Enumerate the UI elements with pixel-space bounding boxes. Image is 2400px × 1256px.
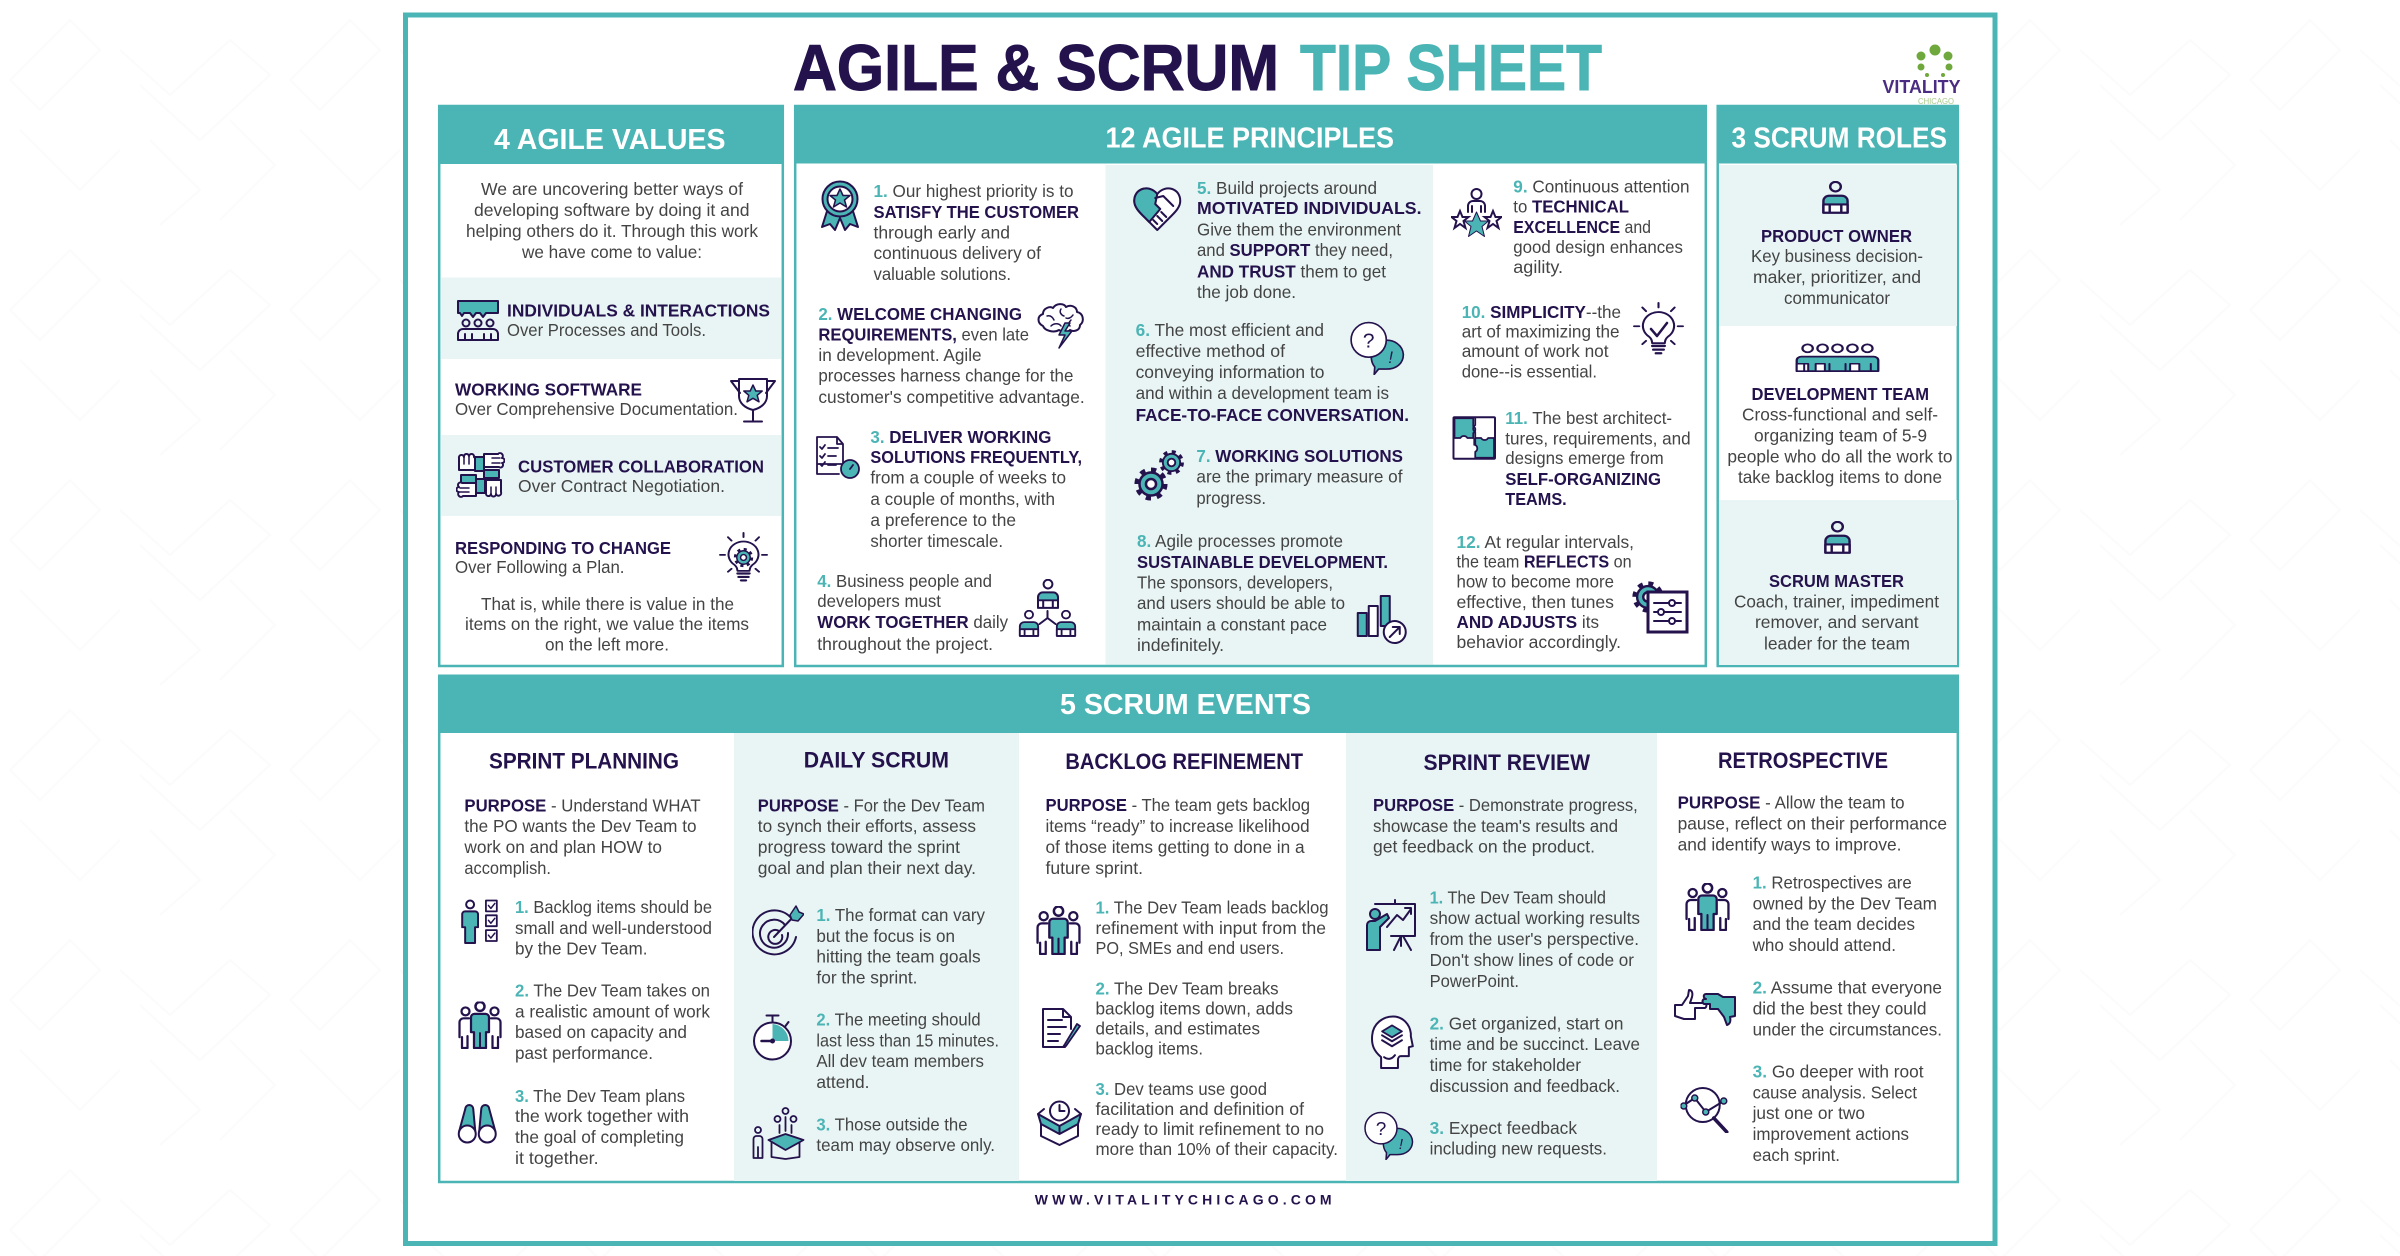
principle 2	[818, 304, 1085, 407]
column: daily scrum	[753, 748, 999, 1159]
icon: question and answer bubbles	[1365, 1112, 1412, 1160]
text: responding to change: RESPONDING TO CHANGE	[455, 538, 671, 558]
principle 9: good design enhances	[1513, 237, 1683, 257]
text: retrospective purpose: pause, reflect on their performance	[1678, 814, 1947, 834]
panel: 4 agile values	[438, 105, 784, 666]
text: working software: WORKING SOFTWARE	[455, 380, 642, 400]
heading: 4 agile values	[438, 105, 784, 164]
text: daily scrum purpose	[758, 795, 985, 878]
item 2: discussion and feedback.	[1430, 1076, 1620, 1096]
text: sprint planning purpose	[463, 795, 701, 878]
principle 6: 6. The most efficient and	[1136, 320, 1324, 340]
text: customer collaboration: CUSTOMER COLLABORATION	[518, 456, 764, 476]
text: daily scrum purpose: to synch their efforts, assess	[758, 816, 976, 836]
icon: product owner	[1823, 182, 1848, 213]
principle 12: AND ADJUSTS its	[1456, 612, 1599, 632]
item 2: 2. Assume that everyone	[1753, 978, 1942, 998]
item 2	[515, 980, 710, 1063]
panel: 5 scrum events	[438, 674, 1959, 1182]
text: daily scrum purpose: goal and plan their next day.	[758, 858, 976, 878]
title	[793, 31, 1602, 104]
principle 4: developers must	[817, 591, 941, 611]
item 2: past performance.	[515, 1043, 653, 1063]
principle 2: in development. Agile	[818, 345, 982, 365]
item 2: 2. The Dev Team takes on	[515, 980, 710, 1000]
item 3: the goal of completing	[515, 1127, 684, 1147]
item 3: the work together with	[515, 1106, 689, 1126]
icon: thumbs up and down	[1674, 989, 1736, 1026]
role: development team: DEVELOPMENT TEAM	[1752, 384, 1929, 404]
item 1	[1752, 872, 1937, 955]
icon: document with pen	[1042, 1008, 1081, 1048]
item 3: it together.	[515, 1148, 599, 1168]
icon: box with clock	[1037, 1100, 1082, 1146]
principle 11: tures, requirements, and	[1505, 428, 1691, 448]
principle 3: SOLUTIONS FREQUENTLY,	[870, 447, 1082, 467]
icon: presenter	[1366, 899, 1416, 951]
principle 6	[1136, 320, 1409, 425]
text: sprint review purpose	[1373, 795, 1638, 856]
column: backlog refinement	[1038, 749, 1338, 1159]
item 3: more than 10% of their capacity.	[1096, 1139, 1338, 1159]
principle 3: from a couple of weeks to	[870, 468, 1066, 488]
icon: person with checklist	[461, 900, 498, 944]
item 3	[1752, 1062, 1924, 1165]
role: scrum master: remover, and servant	[1755, 612, 1919, 632]
principle 12	[1456, 532, 1634, 652]
role: product owner: communicator	[1784, 288, 1890, 308]
icon: target with arrow	[752, 905, 804, 956]
item 2	[1753, 978, 1942, 1039]
item 2: time and be succinct. Leave	[1430, 1034, 1640, 1054]
principle 8: maintain a constant pace	[1137, 614, 1327, 634]
principle 8: SUSTAINABLE DEVELOPMENT.	[1137, 552, 1388, 572]
icon: scrum master	[1825, 522, 1850, 553]
item 2: a realistic amount of work	[515, 1001, 710, 1021]
item 1: but the focus is on	[816, 926, 955, 946]
text: retrospective purpose	[1678, 793, 1947, 854]
text: customer collaboration: Over Contract Negotiation.	[518, 476, 725, 496]
principle 12: 12. At regular intervals,	[1456, 532, 1634, 552]
item 3: cause analysis. Select	[1753, 1082, 1917, 1102]
item 3: 3. Expect feedback	[1430, 1118, 1577, 1138]
principle 3	[870, 427, 1082, 551]
heading: sprint review: SPRINT REVIEW	[1424, 750, 1590, 775]
icon: team hierarchy	[1020, 580, 1075, 636]
principle 11: designs emerge from	[1505, 448, 1664, 468]
item 1: show actual working results	[1430, 908, 1640, 928]
item 2: based on capacity and	[515, 1022, 687, 1042]
principle 10: art of maximizing the	[1462, 322, 1620, 342]
role: scrum master: Coach, trainer, impediment	[1734, 592, 1939, 612]
item 2: 2. Get organized, start on	[1430, 1014, 1623, 1034]
text: working software: Over Comprehensive Documentation.	[455, 399, 738, 419]
item 1	[1430, 887, 1640, 991]
text: sprint planning purpose: work on and plan HOW to	[463, 837, 662, 857]
text: values intro: developing software by doing it and	[474, 200, 750, 220]
item 3	[1096, 1079, 1338, 1159]
principle 10	[1462, 302, 1621, 382]
principle 1: SATISFY THE CUSTOMER	[874, 202, 1079, 222]
principle 8: 8. Agile processes promote	[1137, 531, 1343, 551]
icon: bulb with check	[1634, 303, 1683, 353]
icon: team	[1687, 884, 1728, 930]
principle 1: 1. Our highest priority is to	[874, 181, 1074, 201]
icon: head with layers	[1371, 1016, 1414, 1069]
item 1: who should attend.	[1752, 935, 1896, 955]
text: values intro: We are uncovering better ways of	[481, 179, 743, 199]
item 2: last less than 15 minutes.	[816, 1030, 999, 1050]
item 1: 1. The format can vary	[816, 905, 985, 925]
principle 9: EXCELLENCE and	[1513, 217, 1651, 237]
column: sprint planning	[459, 748, 712, 1168]
icon: magnifier with chart	[1680, 1087, 1729, 1133]
item 1	[1096, 898, 1329, 958]
principle 5: and SUPPORT they need,	[1197, 240, 1393, 260]
text: individuals and interactions: Over Processes and Tools.	[507, 320, 706, 340]
heading: 12 agile principles	[794, 105, 1707, 164]
item 3: including new requests.	[1430, 1139, 1607, 1159]
principle 2: processes harness change for the	[818, 366, 1073, 386]
role: scrum master: SCRUM MASTER	[1769, 571, 1904, 591]
item 3	[515, 1086, 689, 1168]
principle 6: effective method of	[1136, 341, 1285, 361]
item 2	[816, 1009, 999, 1092]
text: retrospective purpose: PURPOSE - Allow the team to	[1678, 793, 1905, 813]
principle 7: progress.	[1196, 488, 1266, 508]
heading: 3 scrum roles: 3 SCRUM ROLES	[1732, 122, 1947, 154]
role: scrum master	[1734, 571, 1939, 654]
item 1: by the Dev Team.	[515, 939, 648, 959]
principle 8: The sponsors, developers,	[1137, 572, 1333, 592]
icon: trophy	[730, 378, 776, 422]
principle 10: 10. SIMPLICITY--the	[1462, 302, 1621, 322]
icon: development team	[1797, 344, 1878, 371]
text: values closing: on the left more.	[545, 634, 669, 654]
text: backlog purpose: items “ready” to increase likelihood	[1046, 816, 1310, 836]
role: development team: organizing team of 5-9	[1754, 426, 1927, 446]
principle 7: are the primary measure of	[1196, 466, 1403, 486]
title: TIP SHEET	[1300, 31, 1602, 104]
heading: retrospective: RETROSPECTIVE	[1718, 748, 1888, 773]
principle 1: valuable solutions.	[874, 264, 1011, 284]
text: sprint review purpose: get feedback on the product.	[1373, 836, 1595, 856]
item 3: facilitation and definition of	[1096, 1099, 1304, 1119]
text: responding to change: Over Following a Plan.	[455, 557, 624, 577]
text: retrospective purpose: and identify ways to improve.	[1678, 834, 1902, 854]
logo: Vitality Chicago	[1882, 44, 1960, 106]
role: product owner	[1751, 226, 1923, 308]
principle 6: and within a development team is	[1136, 383, 1389, 403]
heading: 5 scrum events	[438, 674, 1959, 733]
item 2: time for stakeholder	[1430, 1055, 1581, 1075]
text: responding to change	[455, 538, 671, 577]
icon: gears	[1137, 452, 1182, 498]
item 3: 3. The Dev Team plans	[515, 1086, 685, 1106]
principle 1	[874, 181, 1079, 284]
item 1: 1. Backlog items should be	[515, 897, 712, 917]
principle 8: indefinitely.	[1137, 635, 1224, 655]
role: development team: take backlog items to done	[1738, 467, 1942, 487]
icon: observer with box	[752, 1107, 804, 1160]
principle 11: 11. The best architect-	[1505, 408, 1672, 428]
heading: 12 agile principles: 12 AGILE PRINCIPLES	[1106, 122, 1394, 154]
panel: 3 scrum roles	[1716, 105, 1959, 666]
heading: sprint planning: SPRINT PLANNING	[489, 748, 679, 774]
item 2: did the best they could	[1753, 998, 1926, 1018]
item 1: refinement with input from the	[1096, 918, 1326, 938]
text: sprint planning purpose: accomplish.	[464, 858, 551, 878]
text: values closing: That is, while there is value in the	[481, 594, 734, 614]
text: individuals and interactions	[507, 300, 770, 340]
principle 9	[1513, 176, 1690, 277]
item 3: each sprint.	[1753, 1145, 1840, 1165]
item 1: 1. The Dev Team should	[1430, 887, 1606, 907]
column: retrospective	[1675, 748, 1947, 1165]
item 1: 1. Retrospectives are	[1753, 872, 1912, 892]
item 3	[1430, 1118, 1607, 1159]
principle 12: the team REFLECTS on	[1456, 552, 1632, 572]
principle 6: FACE-TO-FACE CONVERSATION.	[1136, 405, 1409, 425]
text: sprint review purpose: showcase the team's results and	[1373, 816, 1618, 836]
text: sprint review purpose: PURPOSE - Demonstrate progress,	[1373, 795, 1638, 815]
principle 2: customer's competitive advantage.	[818, 387, 1085, 407]
item 2: backlog items.	[1096, 1038, 1203, 1058]
icon: hands collaboration	[456, 452, 505, 498]
principle 4: WORK TOGETHER daily	[817, 612, 1008, 632]
role: product owner: maker, prioritizer, and	[1753, 267, 1921, 287]
text: backlog purpose: of those items getting to done in a	[1046, 837, 1305, 857]
principle 7	[1196, 446, 1403, 508]
principle 6: conveying information to	[1136, 362, 1324, 382]
principle 12: how to become more	[1456, 572, 1614, 592]
icon: team	[460, 1002, 500, 1048]
item 2: attend.	[816, 1072, 870, 1092]
item 3	[816, 1114, 995, 1155]
principle 12: behavior accordingly.	[1456, 632, 1621, 652]
title: AGILE & SCRUM	[793, 31, 1279, 104]
role: development team: people who do all the work to	[1727, 446, 1952, 466]
role: product owner: PRODUCT OWNER	[1761, 226, 1912, 246]
text: backlog purpose: PURPOSE - The team gets backlog	[1046, 795, 1310, 815]
principle 7: 7. WORKING SOLUTIONS	[1196, 446, 1403, 466]
item 1: small and well-understood	[515, 918, 712, 938]
icon: handshake heart	[1133, 187, 1182, 231]
text: customer collaboration	[518, 456, 764, 496]
principle 1: continuous delivery of	[874, 243, 1041, 263]
role: scrum master: leader for the team	[1764, 634, 1910, 654]
item 2: 2. The meeting should	[816, 1009, 981, 1029]
item 2: details, and estimates	[1096, 1018, 1260, 1038]
principle 4: 4. Business people and	[817, 571, 992, 591]
item 1	[515, 897, 712, 959]
item 2: backlog items down, adds	[1096, 998, 1293, 1018]
principle 2: REQUIREMENTS, even late	[818, 324, 1029, 344]
principle 1: through early and	[874, 222, 1010, 242]
icon: stopwatch	[753, 1014, 792, 1060]
icon: gear with sliders	[1635, 584, 1687, 632]
text: values closing: items on the right, we value the items	[465, 614, 749, 634]
text: working software	[455, 380, 738, 419]
principle 4	[817, 571, 1008, 654]
column: sprint review	[1365, 750, 1640, 1160]
icon: award ribbon	[821, 180, 859, 231]
icon: checklist with stopwatch	[816, 436, 860, 479]
item 1	[816, 905, 985, 988]
heading: daily scrum: DAILY SCRUM	[804, 748, 949, 772]
principle 12: effective, then tunes	[1456, 592, 1614, 612]
item 1: owned by the Dev Team	[1753, 893, 1937, 913]
principle 10: amount of work not	[1462, 341, 1609, 361]
text: values closing	[465, 594, 749, 654]
item 1: PO, SMEs and end users.	[1096, 938, 1284, 958]
item 3: team may observe only.	[816, 1135, 995, 1155]
principle 3: a couple of months, with	[870, 489, 1055, 509]
principle 11: SELF-ORGANIZING	[1505, 469, 1661, 489]
heading: backlog refinement: BACKLOG REFINEMENT	[1065, 749, 1304, 774]
principle 5: Give them the environment	[1197, 220, 1401, 240]
text: daily scrum purpose: progress toward the sprint	[758, 837, 960, 857]
principle 8	[1137, 531, 1388, 655]
heading: 5 scrum events: 5 SCRUM EVENTS	[1060, 689, 1311, 721]
icon: binoculars	[458, 1104, 497, 1144]
principle 8: and users should be able to	[1137, 593, 1345, 613]
text: values intro: helping others do it. Through this work	[466, 221, 758, 241]
principle 5: 5. Build projects around	[1197, 178, 1377, 198]
item 3: 3. Dev teams use good	[1096, 1079, 1267, 1099]
icon: bar chart with arrow	[1356, 595, 1407, 644]
item 1: and the team decides	[1753, 914, 1915, 934]
principle 5: MOTIVATED INDIVIDUALS.	[1197, 198, 1422, 218]
item 1: for the sprint.	[816, 968, 918, 988]
principle 9: to TECHNICAL	[1513, 196, 1629, 216]
item 3: ready to limit refinement to no	[1096, 1119, 1324, 1139]
principle 5	[1197, 178, 1422, 302]
icon: question and answer bubbles	[1351, 323, 1403, 374]
role: development team	[1727, 384, 1952, 487]
logo: Vitality Chicago: VITALITY	[1882, 77, 1960, 97]
item 1: Don't show lines of code or	[1430, 950, 1634, 970]
principle 11: TEAMS.	[1505, 489, 1567, 509]
item 2: 2. The Dev Team breaks	[1096, 979, 1279, 999]
item 2	[1096, 979, 1293, 1058]
item 1: hitting the team goals	[816, 947, 981, 967]
icon: puzzle	[1452, 416, 1496, 460]
icon: bulb with gear	[720, 533, 767, 580]
icon: team	[1038, 907, 1079, 954]
role: product owner: Key business decision-	[1751, 246, 1923, 266]
item 1: PowerPoint.	[1430, 971, 1519, 991]
heading: 4 agile values: 4 AGILE VALUES	[494, 124, 726, 156]
principle 3: 3. DELIVER WORKING	[870, 427, 1051, 447]
item 3: just one or two	[1752, 1103, 1865, 1123]
icon: brain with lightning	[1038, 303, 1084, 349]
text: sprint planning purpose: PURPOSE - Understand WHAT	[464, 795, 701, 815]
icon: person with stars	[1451, 188, 1502, 237]
text: backlog purpose	[1046, 795, 1310, 878]
principle 5: the job done.	[1197, 282, 1296, 302]
principle 10: done--is essential.	[1462, 362, 1597, 382]
heading: 3 scrum roles	[1716, 105, 1959, 164]
item 2: under the circumstances.	[1753, 1019, 1942, 1039]
item 1: from the user's perspective.	[1430, 929, 1639, 949]
text: values intro: we have come to value:	[521, 242, 702, 262]
text: sprint planning purpose: the PO wants the Dev Team to	[464, 816, 696, 836]
logo: Vitality Chicago: CHICAGO	[1918, 97, 1954, 106]
icon: individuals and interactions	[457, 300, 499, 341]
text: individuals and interactions: INDIVIDUALS & INTERACTIONS	[507, 300, 770, 320]
item 2: All dev team members	[816, 1051, 984, 1071]
role: development team: Cross-functional and self-	[1742, 404, 1938, 424]
principle 2: 2. WELCOME CHANGING	[818, 304, 1022, 324]
item 3: 3. Those outside the	[816, 1114, 968, 1134]
text: daily scrum purpose: PURPOSE - For the Dev Team	[758, 795, 985, 815]
panel: 12 agile principles	[794, 105, 1707, 666]
principle 9: 9. Continuous attention	[1513, 176, 1690, 196]
item 1: 1. The Dev Team leads backlog	[1096, 898, 1329, 918]
text: values intro	[466, 179, 758, 262]
principle 5: AND TRUST them to get	[1197, 262, 1386, 282]
item 3: improvement actions	[1753, 1124, 1909, 1144]
item 3: 3. Go deeper with root	[1753, 1062, 1924, 1082]
text: backlog purpose: future sprint.	[1046, 858, 1143, 878]
principle 3: a preference to the	[870, 510, 1016, 530]
principle 4: throughout the project.	[817, 634, 993, 654]
item 2	[1430, 1014, 1640, 1096]
principle 11	[1505, 408, 1691, 509]
principle 3: shorter timescale.	[870, 531, 1003, 551]
outer frame	[406, 15, 1995, 1244]
principle 9: agility.	[1513, 257, 1563, 277]
footer website: WWW.VITALITYCHICAGO.COM	[1035, 1192, 1332, 1208]
